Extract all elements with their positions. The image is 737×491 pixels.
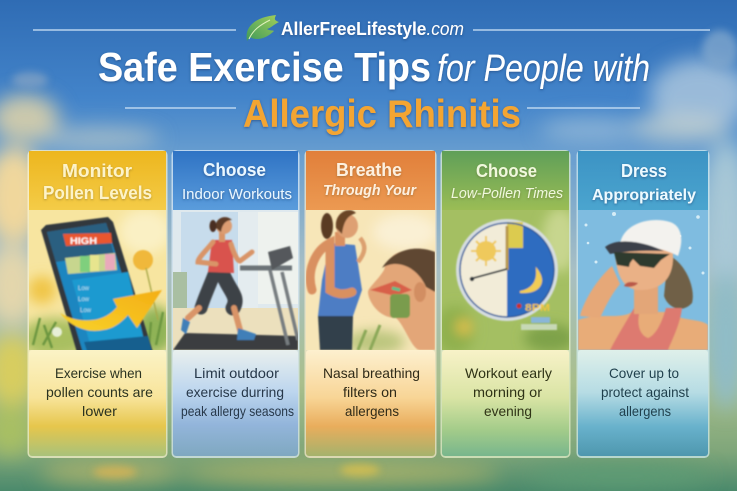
neck and face <box>634 282 658 314</box>
panel: monitor pollen levels: pollen counts are <box>46 384 153 400</box>
heading: dress appropriately <box>592 161 696 204</box>
panel: choose indoor workouts <box>172 150 300 458</box>
phone body <box>41 217 153 356</box>
icon: green leaf <box>247 15 279 41</box>
panel: breathe through your nose: allergens <box>345 403 399 419</box>
sunglasses <box>614 252 670 268</box>
hair <box>664 255 693 309</box>
body text <box>578 350 708 456</box>
arms <box>198 242 216 264</box>
heading: choose low-pollen times: Low-Pollen Times <box>451 185 563 202</box>
runner body <box>318 243 362 316</box>
illustration: phone with pollen level app: Low <box>78 297 90 303</box>
heading: dress appropriately: Appropriately <box>592 187 696 204</box>
panel: monitor pollen levels <box>28 150 168 458</box>
panel: choose low-pollen times: Workout early <box>465 365 552 381</box>
head <box>219 232 225 242</box>
heading: breathe through your <box>323 160 417 199</box>
panel: dress appropriately: allergens <box>619 403 671 419</box>
body text <box>29 350 166 456</box>
heading: breathe through your: Through Your <box>323 182 417 199</box>
body text <box>306 350 435 456</box>
heading: monitor pollen levels <box>43 161 152 203</box>
heading: choose low-pollen times: Choose <box>476 161 537 181</box>
site name: AllerFreeLifestyle.com <box>281 19 464 39</box>
heading: choose indoor workouts: Choose <box>203 160 266 180</box>
illustration: phone with pollen level app: Low <box>80 308 92 314</box>
illustration: woman with cap and sunglasses <box>578 210 708 350</box>
illustration: phone with pollen level app: HIGH <box>70 236 97 247</box>
panel: breathe through your nose <box>304 150 437 458</box>
panel: choose indoor workouts: Limit outdoor <box>194 365 279 381</box>
heading: monitor pollen levels: Pollen Levels <box>43 183 152 203</box>
header divider lines <box>33 30 710 108</box>
body text <box>442 350 569 456</box>
heading: breathe through your: Breathe <box>336 160 402 180</box>
legs <box>201 272 215 308</box>
illustration: woman running on treadmill <box>173 210 298 350</box>
title <box>98 44 650 90</box>
arrow <box>60 290 162 331</box>
logo: leaf and site name <box>247 15 464 41</box>
title: for People with <box>437 48 650 90</box>
panel: dress appropriately <box>576 150 710 458</box>
panel: breathe through your nose: filters on <box>343 384 397 400</box>
title: Safe Exercise Tips <box>98 44 431 90</box>
illustration: woman breathing through nose with nasal diagram <box>306 210 437 354</box>
clock hands <box>506 226 508 270</box>
illustration: phone with pollen level app: Low <box>78 286 90 292</box>
panel: choose low-pollen times <box>435 150 578 458</box>
panel: monitor pollen levels: lower <box>82 403 117 419</box>
treadmill <box>173 333 298 350</box>
heading: choose indoor workouts <box>182 160 292 203</box>
icon: sun <box>476 241 496 261</box>
panel: choose indoor workouts: exercise durring <box>186 384 284 400</box>
heading: dress appropriately: Dress <box>621 161 667 181</box>
illustration: day and night clock <box>442 210 569 350</box>
shoulders and arm <box>578 312 708 350</box>
cap <box>620 220 681 256</box>
torso <box>208 240 234 273</box>
large face profile <box>368 251 435 350</box>
panel: dress appropriately: protect against <box>601 384 689 400</box>
subtitle: Allergic Rhinitis: Allergic Rhinitis <box>243 93 521 136</box>
heading: choose indoor workouts: Indoor Workouts <box>182 186 292 203</box>
panel: dress appropriately: Cover up to <box>609 365 679 381</box>
heading: monitor pollen levels: Monitor <box>62 161 132 181</box>
illustration: day and night clock: 8PM <box>525 303 550 314</box>
panel: breathe through your nose: Nasal breathing <box>323 365 420 381</box>
body text <box>173 350 298 456</box>
icon: crescent moon <box>520 270 541 292</box>
panel: monitor pollen levels: Exercise when <box>55 365 142 381</box>
illustration: phone with pollen level app <box>29 210 166 350</box>
heading: choose low-pollen times <box>451 161 563 202</box>
panel: choose low-pollen times: evening <box>484 403 532 419</box>
swim top <box>610 308 682 350</box>
panel: choose indoor workouts: peak allergy seasons <box>181 403 294 419</box>
panel: choose low-pollen times: morning or <box>473 384 542 400</box>
